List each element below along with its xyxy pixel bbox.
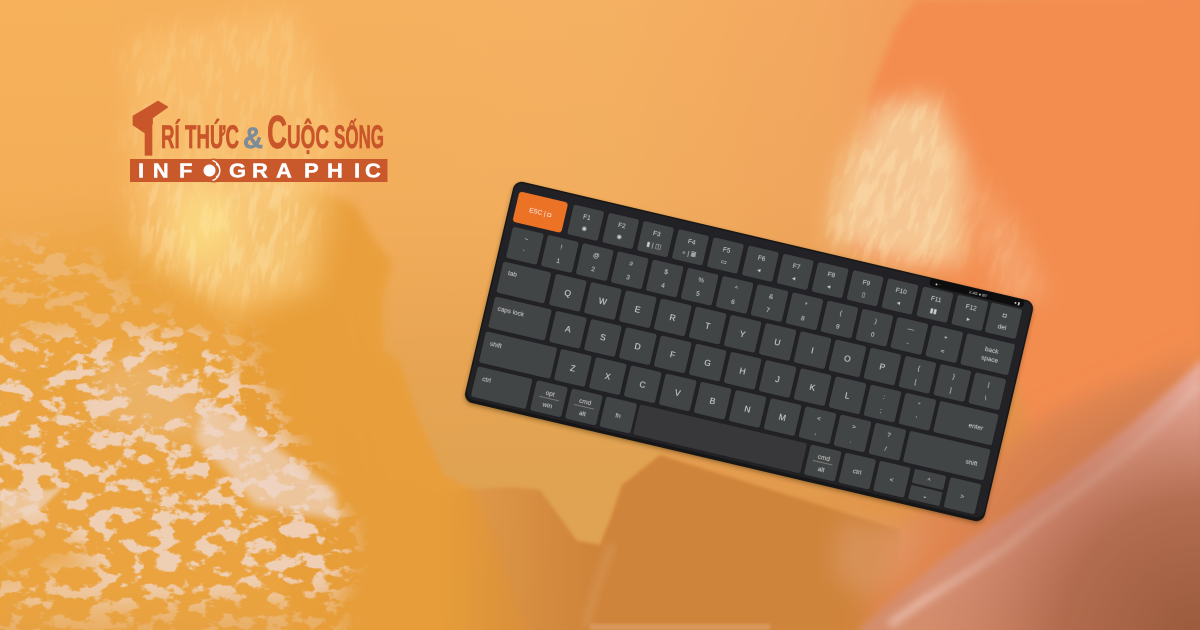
function key row: F10 bbox=[895, 287, 908, 296]
space bar bbox=[632, 404, 808, 474]
QWERTY key row: \ bbox=[984, 395, 987, 402]
number key row: $ bbox=[664, 269, 669, 276]
QWERTY key row: P bbox=[878, 361, 887, 372]
number key row: ` bbox=[521, 250, 525, 257]
number key row: — bbox=[907, 326, 915, 334]
function key row: ◘ bbox=[1002, 312, 1007, 320]
bottom key row: alt bbox=[578, 410, 587, 418]
function key row: F7 bbox=[792, 263, 801, 271]
function key row: F5 bbox=[722, 246, 731, 255]
function key row: ⌕ | ▦ bbox=[681, 249, 696, 259]
number key row: # bbox=[629, 260, 634, 268]
number key row: 8 bbox=[800, 315, 806, 323]
left shaded mountain body bbox=[0, 220, 340, 630]
number key row: ^ bbox=[734, 285, 739, 293]
QWERTY key row: U bbox=[773, 337, 782, 348]
shift key row: . bbox=[849, 437, 853, 445]
function key row: F12 bbox=[965, 303, 978, 313]
streak texture upper left bbox=[130, 19, 327, 304]
QWERTY key row: O bbox=[843, 353, 852, 364]
function key row: del bbox=[997, 323, 1007, 332]
logo: Tri Thức & Cuộc Sống Infographic bbox=[130, 92, 388, 182]
number key row: 7 bbox=[765, 307, 771, 315]
function key row: ▭ bbox=[720, 258, 728, 266]
number key row: 0 bbox=[870, 331, 876, 339]
number key row: 5 bbox=[695, 290, 701, 298]
function key row: F4 bbox=[687, 238, 696, 247]
function key row: ◂ bbox=[791, 275, 797, 283]
shift key row: B bbox=[709, 395, 717, 407]
white blotch texture left bbox=[0, 231, 368, 630]
QWERTY key row: Y bbox=[739, 329, 747, 340]
pale rock face right bbox=[828, 95, 965, 265]
number key row: * bbox=[804, 302, 808, 309]
shift key row: V bbox=[674, 387, 682, 398]
home key row bbox=[488, 296, 999, 446]
keyboard body bbox=[463, 180, 1035, 523]
QWERTY key row: | bbox=[987, 381, 991, 389]
logo heading text: RÍ THỨC bbox=[161, 119, 239, 155]
bottom key row: < bbox=[889, 477, 894, 484]
QWERTY key row: W bbox=[598, 295, 608, 307]
number key row: 2 bbox=[590, 266, 596, 274]
upper rock glow bbox=[130, 10, 345, 320]
function key row: ◂ bbox=[756, 267, 762, 275]
bottom key row: fn bbox=[615, 412, 622, 420]
shift key row: Z bbox=[569, 363, 576, 374]
bottom key row: ctrl bbox=[481, 376, 492, 385]
function key row: ◂ bbox=[826, 283, 832, 291]
shift key row: C bbox=[639, 379, 647, 390]
home key row: S bbox=[599, 332, 607, 343]
shift key row: ? bbox=[886, 432, 892, 440]
logo heading text: & bbox=[243, 122, 263, 155]
function key row: ▮▮ bbox=[929, 307, 938, 316]
bottom key row: cmd bbox=[817, 454, 831, 463]
home key row: : bbox=[882, 394, 886, 401]
home key row: K bbox=[809, 382, 817, 393]
shift key row bbox=[478, 331, 991, 481]
function key row bbox=[512, 191, 1023, 340]
shift key row: X bbox=[604, 371, 612, 382]
home key row: ' bbox=[914, 416, 917, 423]
function key row: F1 bbox=[582, 214, 592, 222]
function key row: F9 bbox=[862, 279, 871, 288]
QWERTY key row: I bbox=[810, 345, 815, 356]
QWERTY key row bbox=[496, 261, 1007, 411]
shift key row: M bbox=[778, 412, 787, 423]
number key row: ( bbox=[839, 310, 844, 317]
number key row: & bbox=[768, 293, 774, 301]
home key row: J bbox=[774, 374, 781, 385]
logo heading text: C bbox=[267, 106, 287, 158]
bottom key row: win bbox=[541, 401, 553, 410]
number key row: - bbox=[906, 340, 909, 347]
bottom key row: ⌄ bbox=[922, 492, 929, 501]
icon: target in the letter O bbox=[202, 158, 226, 182]
shift key row: shift bbox=[965, 458, 978, 468]
function key row: ◂ bbox=[896, 300, 901, 307]
QWERTY key row: tab bbox=[507, 270, 518, 279]
home key row: " bbox=[917, 402, 921, 410]
function key row: F6 bbox=[757, 255, 766, 263]
infographic banner: INFOGRAPHIC bbox=[138, 160, 381, 182]
shift key row: , bbox=[814, 429, 818, 437]
darker ground below the plateau bbox=[440, 455, 900, 630]
status strip bbox=[929, 278, 1025, 308]
snow ridges left bbox=[195, 400, 340, 520]
number key row: ) bbox=[874, 318, 878, 325]
pink swoosh bbox=[855, 358, 1200, 630]
QWERTY key row: T bbox=[704, 320, 711, 331]
shift key row: N bbox=[743, 404, 752, 415]
function key row: ✺ bbox=[616, 233, 623, 242]
number key row: 3 bbox=[625, 274, 631, 282]
number key row: 6 bbox=[730, 299, 736, 306]
number key row: ~ bbox=[524, 236, 529, 244]
number key row: + bbox=[943, 334, 949, 342]
function key row: ▮ | ◫ bbox=[646, 241, 662, 251]
bottom key row bbox=[470, 366, 982, 515]
number key row: 9 bbox=[835, 323, 841, 331]
shift key row: shift bbox=[489, 341, 502, 350]
number key row: = bbox=[940, 348, 945, 356]
logo heading text: T bbox=[134, 92, 164, 170]
number key row: back bbox=[984, 346, 1000, 356]
home key row: D bbox=[634, 341, 642, 352]
shift key row: / bbox=[884, 446, 887, 453]
number key row: 1 bbox=[555, 258, 561, 265]
home key row: L bbox=[844, 390, 851, 401]
bottom key row: ctrl bbox=[852, 468, 863, 477]
number key row: % bbox=[697, 277, 705, 285]
bottom key row: ^ bbox=[926, 477, 932, 485]
yellow glow bbox=[175, 190, 235, 260]
logo heading text: UỘC bbox=[287, 119, 329, 155]
number key row: 4 bbox=[660, 282, 666, 290]
QWERTY key row: } bbox=[952, 373, 956, 381]
lit plateau bbox=[383, 260, 700, 545]
bottom ground strip bbox=[590, 624, 770, 630]
home key row: A bbox=[564, 324, 572, 335]
home key row: F bbox=[669, 349, 676, 360]
bottom key row: cmd bbox=[578, 398, 592, 407]
key: Esc bbox=[512, 191, 568, 233]
home key row: caps lock bbox=[497, 306, 525, 319]
number key row: ! bbox=[560, 244, 563, 252]
QWERTY key row: ] bbox=[949, 387, 952, 394]
function key row: ✺ bbox=[581, 225, 588, 234]
right rock body bbox=[850, 0, 1200, 480]
function key row: F11 bbox=[930, 295, 942, 305]
QWERTY key row: Q bbox=[563, 287, 573, 299]
function key row: F2 bbox=[617, 222, 627, 230]
status strip: 2.4G ● BT bbox=[969, 289, 988, 298]
bottom key row: > bbox=[959, 493, 965, 501]
number key row: @ bbox=[592, 252, 601, 260]
ground below right rock bbox=[860, 350, 1200, 630]
key: Esc: ESC | ◘ bbox=[528, 207, 552, 219]
status strip: ● ᛫ bbox=[935, 281, 942, 288]
QWERTY key row: { bbox=[917, 365, 921, 373]
bottom key row: alt bbox=[817, 466, 825, 474]
home key row: G bbox=[703, 357, 712, 368]
number key row bbox=[505, 226, 1016, 376]
QWERTY key row: [ bbox=[914, 379, 917, 386]
status strip: ● ▮ bbox=[1014, 300, 1021, 306]
home key row: H bbox=[738, 365, 747, 377]
shift key row: > bbox=[851, 424, 857, 431]
function key row: F3 bbox=[652, 230, 662, 239]
function key row: ▸ bbox=[966, 316, 971, 324]
home key row: enter bbox=[968, 422, 985, 433]
function key row: F8 bbox=[827, 271, 836, 280]
QWERTY key row: R bbox=[669, 312, 677, 323]
QWERTY key row: E bbox=[634, 304, 642, 315]
pale flecks near swoosh bbox=[830, 520, 935, 600]
left cliff edge bbox=[240, 190, 530, 630]
function key row: ▯ bbox=[861, 291, 866, 299]
shift key row: < bbox=[816, 415, 822, 423]
logo heading text bbox=[132, 100, 384, 156]
number key row: space bbox=[980, 354, 999, 365]
logo heading text: SỐNG bbox=[334, 119, 384, 155]
bottom key row: opt bbox=[545, 390, 555, 399]
streak texture right rock bbox=[826, 100, 960, 264]
keyboard bbox=[463, 180, 1035, 523]
home key row: ; bbox=[879, 407, 883, 415]
